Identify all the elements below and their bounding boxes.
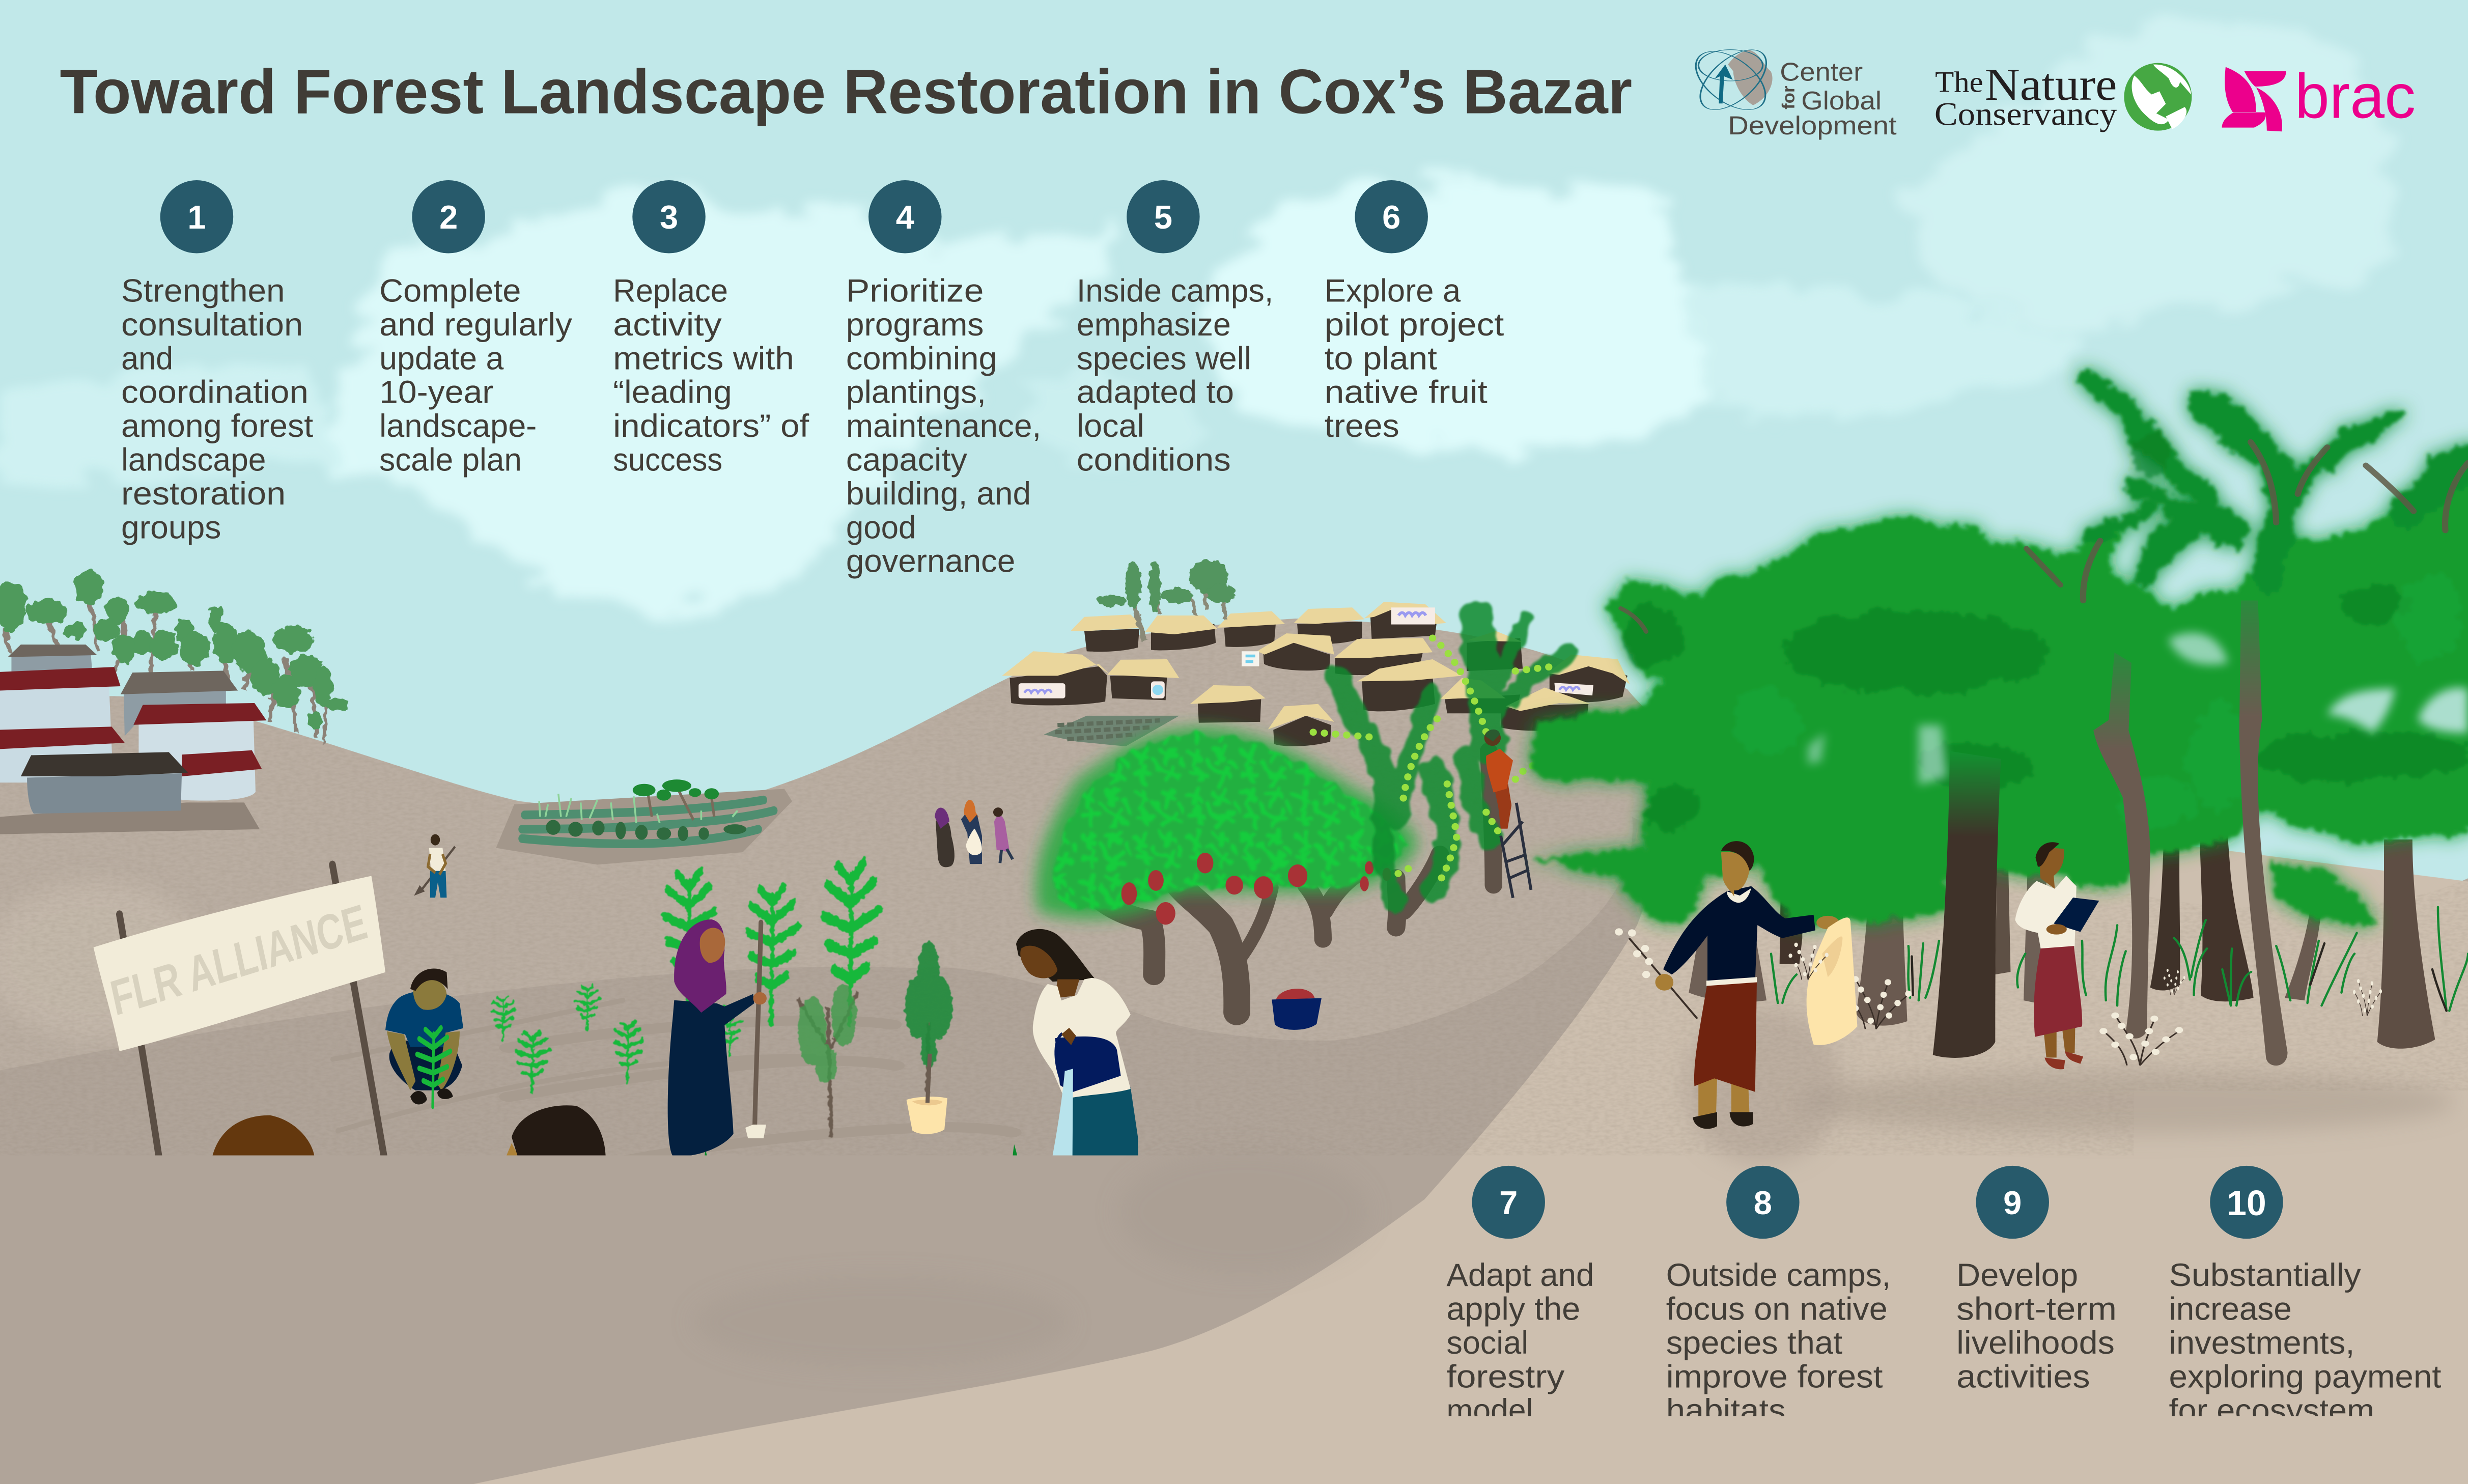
sarong xyxy=(1694,978,1757,1092)
apple tree leaves xyxy=(1055,735,1408,910)
step 4: good xyxy=(846,510,916,545)
man with shovel in the distance xyxy=(414,834,455,898)
step 2: 10-year xyxy=(379,375,493,410)
gown xyxy=(668,994,754,1156)
upper hill xyxy=(0,619,2468,1484)
right red roof building xyxy=(138,720,256,801)
watering can xyxy=(1055,1037,1121,1092)
step 3: indicators” of xyxy=(613,408,809,444)
hut row back xyxy=(1071,602,1446,652)
logo: BRAC xyxy=(2222,62,2416,132)
logo: BRAC: brac xyxy=(2295,62,2416,132)
step 5: local xyxy=(1077,408,1144,444)
step 1: Strengthen xyxy=(121,273,285,309)
logo: Center for Global Development: Global xyxy=(1801,86,1882,115)
collar and hem xyxy=(1706,888,1757,986)
step 1: and xyxy=(121,341,173,376)
paper grain xyxy=(0,619,2468,1484)
camp signs xyxy=(1242,651,1259,666)
orbit emblem xyxy=(1682,48,1779,111)
step 4: capacity xyxy=(846,442,967,478)
step 1: among forest xyxy=(121,408,314,444)
logo: Center for Global Development: Development xyxy=(1728,111,1897,140)
hair xyxy=(1016,929,1096,982)
logo: The Nature Conservancy: Conservancy xyxy=(1934,96,2117,133)
apples xyxy=(1121,853,1391,925)
step 3 xyxy=(613,180,809,478)
woman in hijab xyxy=(668,919,767,1156)
step 4: Prioritize xyxy=(846,273,984,309)
light lower right ground xyxy=(472,787,2468,1484)
man in dark jacket: jacket xyxy=(147,1234,374,1484)
logo: The Nature Conservancy: Nature xyxy=(1985,60,2117,110)
clouds xyxy=(0,20,2392,606)
sky gaps in canopy xyxy=(1808,633,2468,785)
step 9: livelihoods xyxy=(1956,1325,2115,1361)
spire crowns xyxy=(2092,377,2468,580)
hut row middle xyxy=(1257,631,1630,731)
step 2: and regularly xyxy=(379,307,572,343)
forest grass xyxy=(1771,907,2468,1011)
plants behind the map xyxy=(420,1187,618,1224)
ground shadow xyxy=(0,802,260,834)
face and neck xyxy=(1020,946,1079,998)
background tree line (left) xyxy=(0,569,349,742)
sweater xyxy=(1663,886,1815,982)
seedling xyxy=(417,1028,451,1107)
step 8: 8 xyxy=(1754,1184,1772,1221)
step 4: 4 xyxy=(896,199,914,236)
step 8: focus on native xyxy=(1666,1292,1888,1327)
step 2: Complete xyxy=(379,273,521,309)
sign text: FLR ALLIANCE xyxy=(106,894,372,1026)
step 5: emphasize xyxy=(1077,307,1231,343)
step 4: maintenance, xyxy=(846,408,1041,444)
darker canopy patches xyxy=(1620,432,2468,826)
logo: Center for Global Development: Center xyxy=(1780,57,1863,86)
step 10 xyxy=(2169,1166,2442,1462)
step 5: Inside camps, xyxy=(1077,273,1273,309)
lower left shade xyxy=(0,989,519,1484)
step 10: investments, xyxy=(2169,1325,2354,1361)
step 9: activities xyxy=(1956,1359,2090,1394)
step 6: trees xyxy=(1325,408,1399,444)
title: Toward Forest Landscape Restoration in Cox’s Bazar xyxy=(60,57,1632,127)
step 4 xyxy=(846,180,1041,579)
step 3: activity xyxy=(613,307,722,343)
crouching man planting xyxy=(385,968,463,1107)
jacket logo xyxy=(200,1303,260,1388)
step 7: model xyxy=(1446,1393,1533,1429)
legs xyxy=(2043,1024,2076,1057)
step 10: exploring payment xyxy=(2169,1359,2442,1394)
head xyxy=(1721,852,1750,897)
distant group of three women xyxy=(935,800,1013,867)
step 7: Adapt and xyxy=(1446,1257,1594,1293)
step 5: adapted to xyxy=(1077,375,1234,410)
step 6: Explore a xyxy=(1325,273,1461,309)
step 2: 2 xyxy=(439,199,458,236)
step 5: 5 xyxy=(1154,199,1172,236)
step 6: to plant xyxy=(1325,341,1437,376)
cream sack xyxy=(1807,917,1857,1045)
hut front centre xyxy=(1190,685,1334,746)
blouse xyxy=(2015,876,2077,948)
step 1: landscape xyxy=(121,442,266,478)
front dark building xyxy=(27,773,182,814)
lighter canopy patches xyxy=(1731,575,2463,829)
logo: Center for Global Development xyxy=(1682,48,1897,140)
step 6: pilot project xyxy=(1325,307,1504,343)
step 8: Outside camps, xyxy=(1666,1257,1891,1293)
step 4: governance xyxy=(846,544,1015,579)
skirt xyxy=(2034,943,2082,1037)
step 8: species that xyxy=(1666,1325,1842,1361)
step 1: 1 xyxy=(187,199,206,236)
step 6 xyxy=(1325,180,1504,444)
step 1: restoration xyxy=(121,476,286,512)
logo: The Nature Conservancy: The xyxy=(1935,66,1983,99)
water stream xyxy=(1035,1069,1077,1241)
legs xyxy=(1698,1073,1750,1117)
step 2: landscape- xyxy=(379,408,537,444)
person on ladder picking fruit xyxy=(1484,730,1531,898)
lower right tuft xyxy=(2270,862,2370,922)
hand xyxy=(753,992,767,1004)
tall bright fern trees xyxy=(664,862,879,1023)
trousers xyxy=(389,1041,462,1090)
step 4: programs xyxy=(846,307,984,343)
shirt logo xyxy=(532,1299,630,1349)
picker xyxy=(1495,784,1511,829)
step 4: combining xyxy=(846,341,997,376)
step 7: social xyxy=(1446,1325,1528,1361)
camp buildings (left) xyxy=(0,645,266,834)
logo: The Nature Conservancy xyxy=(1934,60,2192,132)
leaf globe xyxy=(2124,63,2192,131)
bucket of apples xyxy=(1272,989,1322,1030)
potted tree foliage xyxy=(905,941,952,1102)
step 10: increase xyxy=(2169,1292,2292,1327)
staff xyxy=(755,922,761,1131)
step 1: consultation xyxy=(121,307,303,343)
man in dark jacket: head xyxy=(229,1162,314,1246)
step 6: 6 xyxy=(1382,199,1400,236)
step 9: Develop xyxy=(1956,1257,2078,1293)
man in cream shirt: head xyxy=(506,1143,605,1243)
sandals xyxy=(1693,1112,1753,1129)
camp trees xyxy=(1096,560,1236,640)
apple tree soft crown xyxy=(1036,727,1418,919)
step 4: building, and xyxy=(846,476,1031,512)
hijab xyxy=(674,919,726,1013)
step 3: 3 xyxy=(660,199,678,236)
face and hair xyxy=(413,978,446,1010)
planting rows xyxy=(332,1000,1047,1265)
man in cream shirt: hand on map xyxy=(613,1227,640,1244)
tree nursery bed xyxy=(496,779,792,864)
step 9 xyxy=(1956,1166,2117,1394)
step 10: Substantially xyxy=(2169,1257,2361,1293)
step 10: 10 xyxy=(2227,1183,2266,1223)
step 7 xyxy=(1446,1166,1594,1429)
man with sprig and bag xyxy=(1615,841,1857,1129)
jackfruit-like tree foliage xyxy=(1335,614,1569,902)
lime fruit clusters xyxy=(1313,638,1559,885)
step 7: forestry xyxy=(1446,1359,1565,1394)
step 9: short-term xyxy=(1956,1292,2117,1327)
right forest: front trunks and branches xyxy=(1620,442,2468,1066)
arms xyxy=(387,1031,460,1090)
shirt xyxy=(385,991,463,1047)
step 2: update a xyxy=(379,341,504,376)
sign poles xyxy=(120,864,395,1265)
step 2 xyxy=(379,180,572,478)
right forest: back trunks xyxy=(1689,772,2435,1049)
woman with clipboard xyxy=(2015,842,2099,1069)
man in cream shirt: shirt xyxy=(416,1227,701,1484)
step 1: groups xyxy=(121,510,221,545)
sign board xyxy=(94,876,385,1051)
corn-like plants xyxy=(682,1144,1031,1267)
hand on can xyxy=(1061,1028,1076,1045)
hands xyxy=(1656,974,1673,991)
hand xyxy=(2046,924,2067,935)
sprig in hand xyxy=(1615,928,1697,1019)
step 10: services xyxy=(2169,1426,2288,1462)
step 9: 9 xyxy=(2003,1184,2022,1221)
FLR Alliance sign xyxy=(94,864,395,1265)
step 10: for ecosystem xyxy=(2169,1393,2374,1429)
planning men with map xyxy=(147,1105,701,1484)
step 8: habitats xyxy=(1666,1393,1786,1429)
thin sapling xyxy=(798,984,858,1136)
face xyxy=(700,928,725,963)
blouse xyxy=(1033,978,1131,1099)
step 3: Replace xyxy=(613,273,728,309)
tree pot xyxy=(907,1054,947,1134)
planning map xyxy=(286,1212,629,1439)
flowering shrubs xyxy=(1843,969,2382,1066)
branch in sack xyxy=(1788,943,1829,979)
skirt xyxy=(1054,1087,1139,1244)
main canopy xyxy=(1533,476,2468,924)
step 2: scale plan xyxy=(379,442,522,478)
step 1 xyxy=(121,180,314,545)
clipboard xyxy=(2054,898,2099,932)
step 3: metrics with xyxy=(613,341,794,376)
refugee camp on hilltop xyxy=(1002,602,1630,746)
step 4: plantings, xyxy=(846,375,986,410)
step 1: coordination xyxy=(121,375,308,410)
middle grey building xyxy=(124,691,226,736)
woman with watering can xyxy=(1016,929,1139,1244)
step 3: “leading xyxy=(613,375,732,410)
step 6: native fruit xyxy=(1325,375,1488,410)
planting field band xyxy=(0,817,1668,1484)
apple fruit trees: trunks xyxy=(1087,751,1494,1012)
right forest: foliage xyxy=(1533,377,2468,924)
step 5: conditions xyxy=(1077,442,1231,478)
head xyxy=(2040,847,2064,889)
ground: hills xyxy=(0,619,2468,1484)
back grey building xyxy=(11,655,93,674)
hut front left xyxy=(1002,651,1179,706)
small ferns xyxy=(492,986,742,1092)
soft shading on ground xyxy=(0,881,2455,1369)
step 7: apply the xyxy=(1446,1292,1580,1327)
step 8 xyxy=(1666,1166,1891,1429)
ladder xyxy=(1501,803,1531,898)
shoes xyxy=(410,1088,453,1104)
vegetable patch xyxy=(1044,716,1179,746)
step 5: species well xyxy=(1077,341,1251,376)
step 8: improve forest xyxy=(1666,1359,1883,1394)
red roof building xyxy=(0,686,113,782)
logo: Center for Global Development: for xyxy=(1779,86,1799,109)
step 3: success xyxy=(613,442,722,478)
seedlings and saplings in the field xyxy=(492,862,952,1136)
step 5 xyxy=(1077,180,1273,478)
step 7: 7 xyxy=(1499,1184,1518,1221)
